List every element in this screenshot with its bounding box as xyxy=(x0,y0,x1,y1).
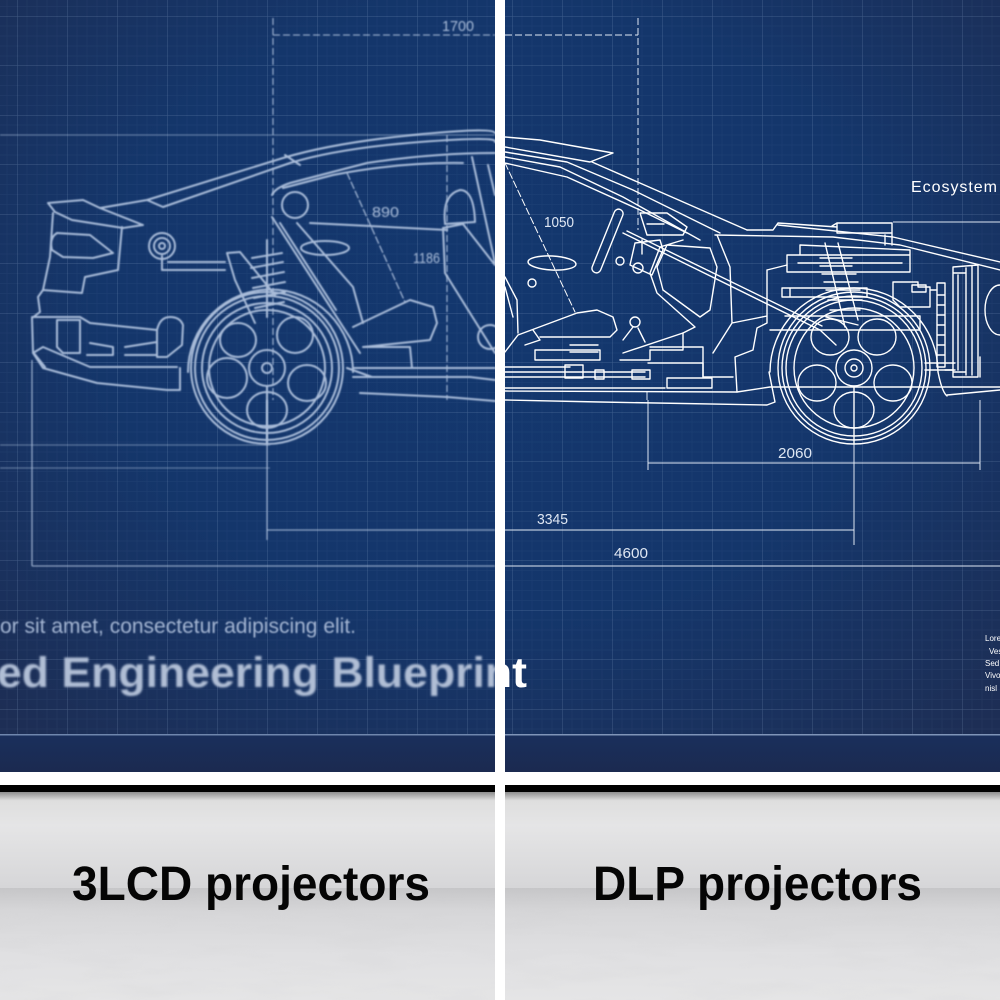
small cropped text block: Vivo xyxy=(985,671,1000,680)
floor texture xyxy=(0,888,1000,1000)
roof and windshield xyxy=(505,137,747,240)
panel: DLP blueprint screen xyxy=(505,0,1000,772)
dimension labels right xyxy=(537,214,812,562)
label 1700: 1700 xyxy=(442,18,474,35)
front seat xyxy=(443,157,495,353)
steering wheel xyxy=(591,208,624,274)
radiator xyxy=(945,265,978,377)
label 2060: 2060 xyxy=(778,445,812,462)
dimension labels left xyxy=(372,18,474,267)
engine block xyxy=(782,245,910,297)
floor pan xyxy=(505,372,1000,405)
black screen edge xyxy=(0,785,1000,792)
frame line left xyxy=(0,734,495,736)
blueprint background right xyxy=(505,0,1000,734)
small cropped text block: nisl xyxy=(985,684,997,693)
front seat xyxy=(505,277,617,352)
label 1186: 1186 xyxy=(413,250,440,267)
panel: 3LCD blueprint screen xyxy=(0,0,495,772)
small cropped text block: Sed xyxy=(985,659,999,668)
wall xyxy=(0,792,1000,888)
white screen frame xyxy=(0,772,1000,785)
rear body xyxy=(32,213,122,367)
dash circles xyxy=(528,257,643,327)
air box xyxy=(832,223,892,245)
front light xyxy=(985,285,1000,335)
shock mount circles xyxy=(149,233,175,259)
caption: DLP projectors: DLP projectors xyxy=(593,858,922,911)
steering bar xyxy=(623,231,822,330)
bottom band right xyxy=(505,751,800,772)
rear bumper xyxy=(32,317,183,390)
bottom band left xyxy=(201,751,495,772)
rear wheel xyxy=(188,290,353,444)
label 3345: 3345 xyxy=(537,511,568,528)
fuse box xyxy=(893,282,937,307)
blueprint heading, washed out: ed Engineering Blueprint xyxy=(0,649,527,697)
small cropped text block xyxy=(985,634,1000,693)
hood xyxy=(715,223,1000,270)
front wheel xyxy=(770,288,938,444)
rear seat and interior xyxy=(272,192,495,401)
frame line right xyxy=(505,734,1000,736)
floor structure xyxy=(505,333,712,388)
seat dashed line xyxy=(505,163,575,312)
front bumper xyxy=(925,357,1000,396)
lorem ipsum subtitle: or sit amet, consectetur adipiscing elit. xyxy=(0,615,356,638)
dimension lines right xyxy=(505,18,1000,566)
label 4600: 4600 xyxy=(614,545,648,562)
rear suspension xyxy=(227,240,285,323)
label 890: 890 xyxy=(372,204,399,221)
roof lines xyxy=(100,130,495,208)
fender and firewall xyxy=(648,235,787,392)
heading end letter, crisp: ed Engineering Blueprint xyxy=(0,649,527,697)
ecosystem label: Ecosystem xyxy=(911,179,997,196)
toothed strip xyxy=(937,283,945,367)
front suspension xyxy=(820,243,862,345)
floor xyxy=(0,888,1000,1000)
cabin panel xyxy=(623,240,717,353)
pedal assembly xyxy=(623,213,687,342)
shock mount xyxy=(162,256,225,270)
rear spoiler xyxy=(48,200,143,228)
blueprint background left xyxy=(0,0,495,734)
centre divider xyxy=(495,0,505,1000)
tail light xyxy=(51,233,113,258)
caption: 3LCD projectors: 3LCD projectors xyxy=(72,858,430,911)
door handle xyxy=(528,255,576,271)
dimension lines left xyxy=(0,18,495,566)
grid left xyxy=(0,0,495,735)
car drawing: crisp front half xyxy=(505,137,1000,444)
grid right xyxy=(505,0,1000,735)
car drawing: washed-out rear half xyxy=(32,130,502,444)
seat dashed line xyxy=(347,173,405,302)
label 1050: 1050 xyxy=(544,214,574,231)
front seat circle xyxy=(478,325,502,349)
